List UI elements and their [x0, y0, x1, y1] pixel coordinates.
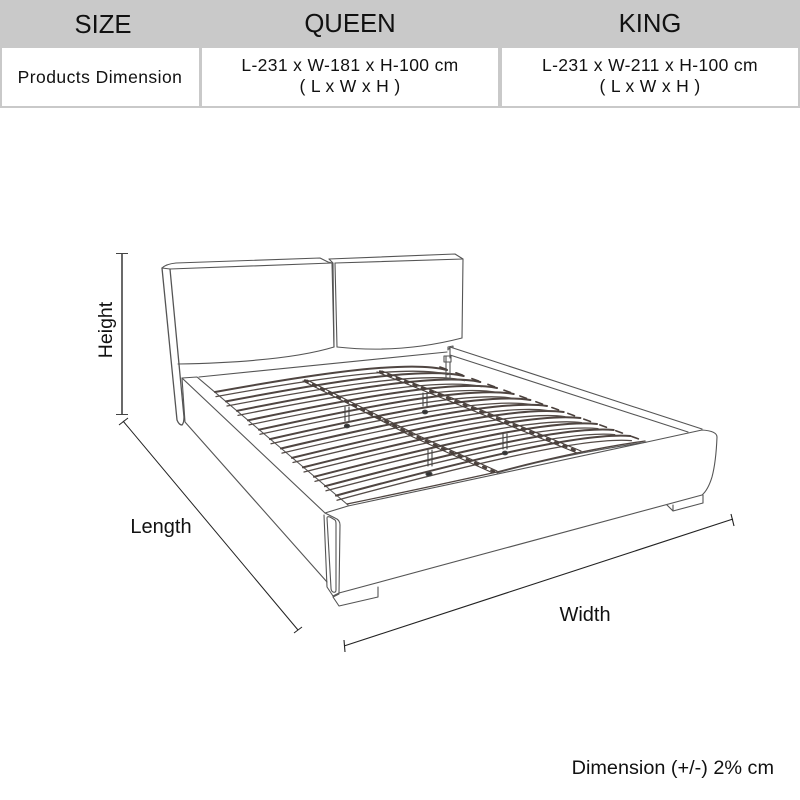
heading: size: SIZE: [74, 11, 132, 39]
width label: Width: [559, 604, 611, 626]
foot: front left: [333, 587, 378, 606]
size table: [0, 0, 800, 108]
heading: queen: QUEEN: [304, 10, 396, 38]
king dimensions: L-231 x W-211 x H-100 cm: [542, 55, 758, 75]
queen dimensions: ( L x W x H ): [299, 76, 401, 96]
heading: king: KING: [619, 10, 681, 38]
dimension arrow: length: [119, 418, 302, 633]
foot: back right: [667, 495, 703, 511]
height label: Height: [95, 301, 117, 358]
table header band: [0, 0, 800, 48]
bed frame: [182, 346, 717, 593]
tolerance note: Dimension (+/-) 2% cm: [572, 757, 774, 779]
bed slats: [215, 367, 645, 504]
king dimensions: ( L x W x H ): [599, 76, 701, 96]
corner bracket: [324, 513, 340, 596]
dimension arrow: width: [344, 514, 734, 652]
row label: products dimension: Products Dimension: [18, 67, 182, 87]
bed line drawing: [162, 254, 717, 606]
slat crossbeams: [303, 367, 647, 473]
length label: Length: [130, 516, 192, 538]
dimension arrow: height: [116, 253, 128, 415]
queen dimensions: L-231 x W-181 x H-100 cm: [241, 55, 459, 75]
headboard: [162, 254, 463, 425]
support legs: [344, 356, 508, 476]
